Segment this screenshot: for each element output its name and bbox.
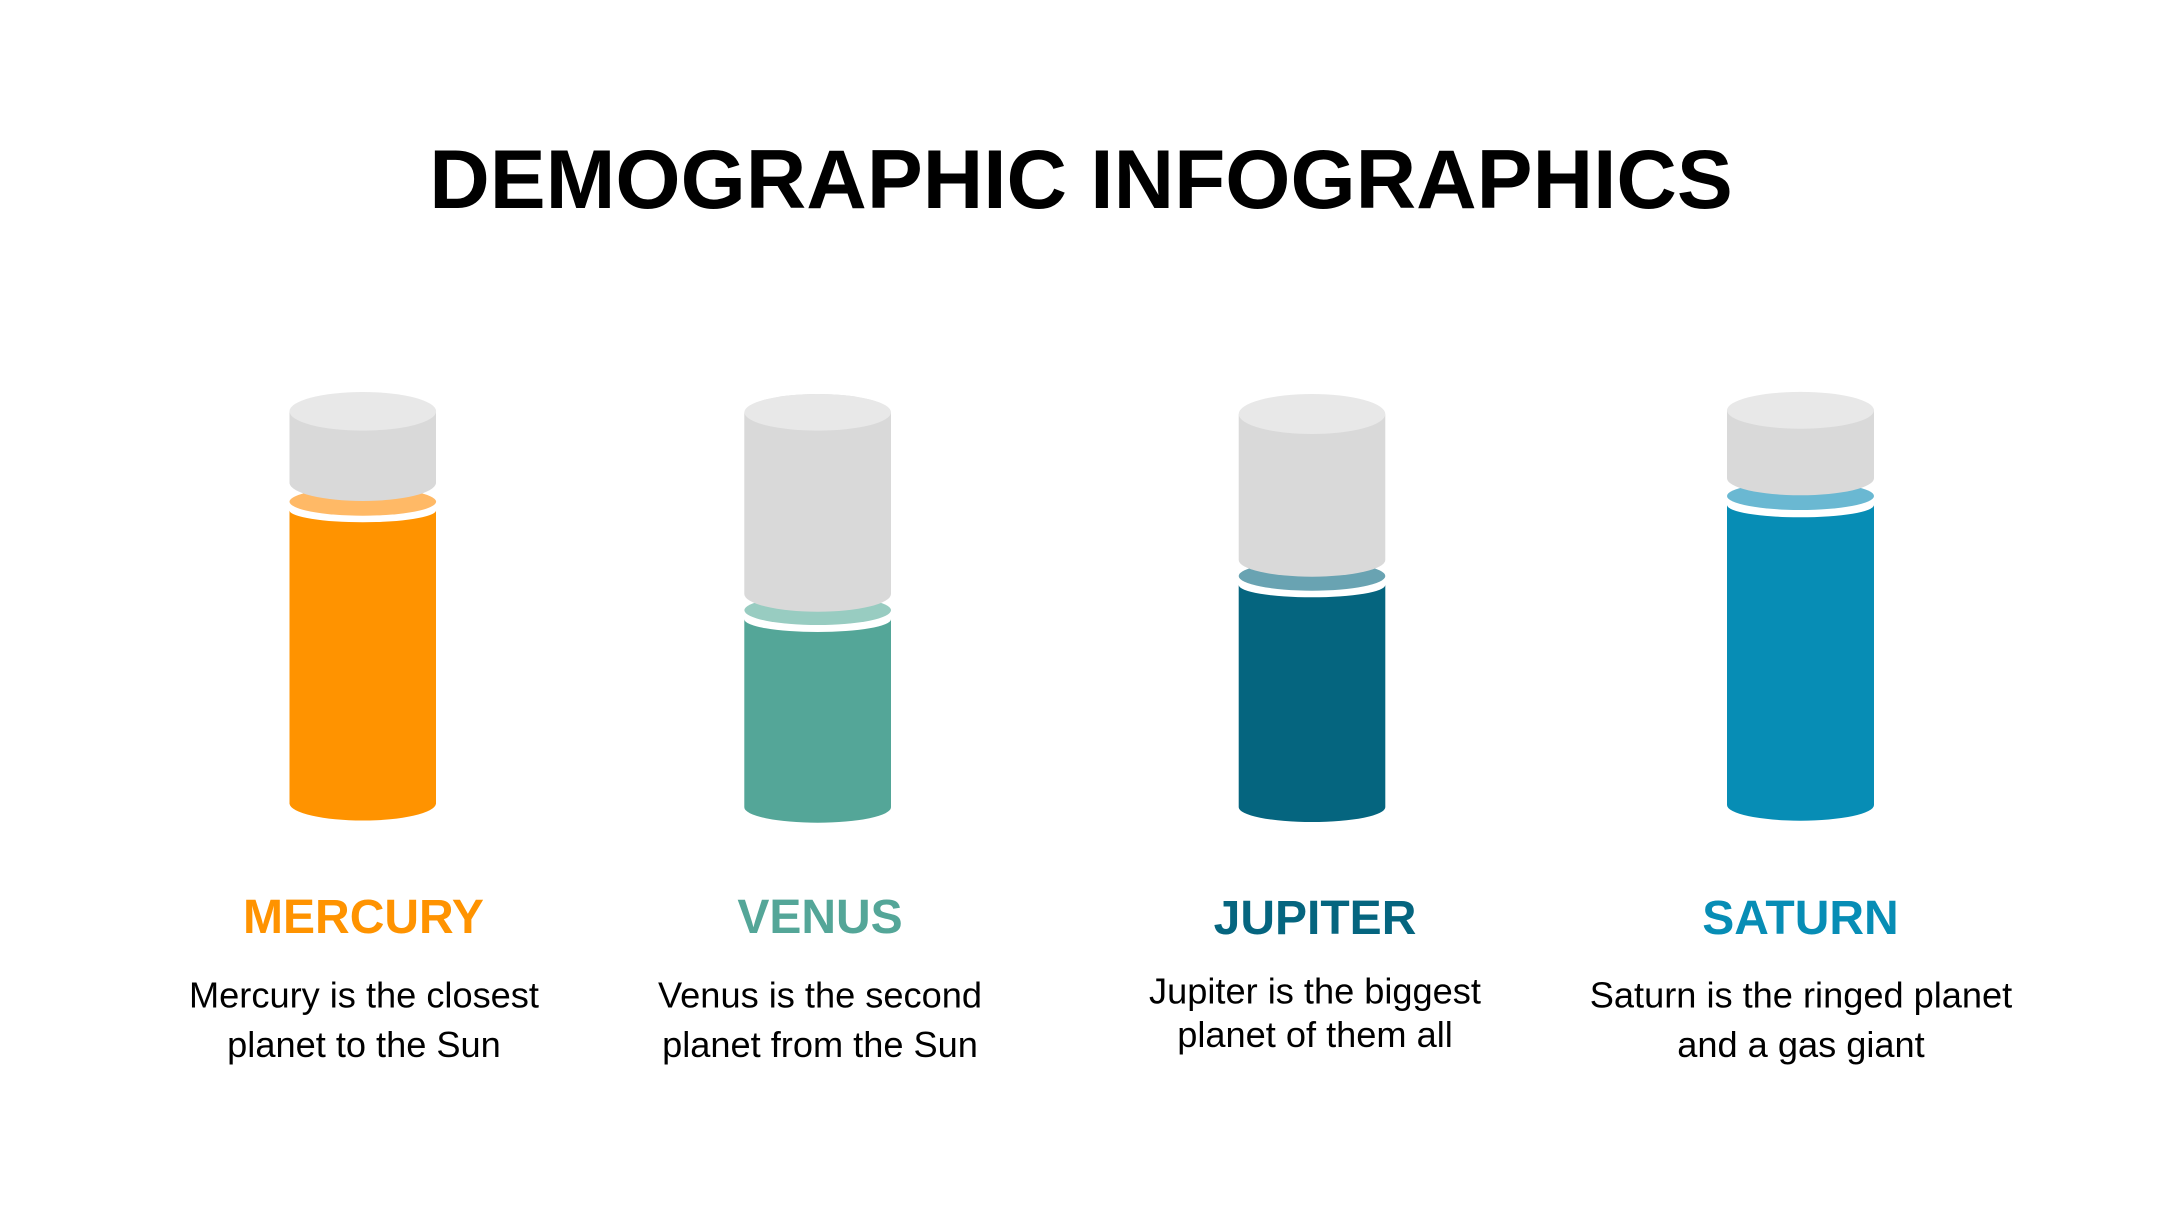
cylinder empty portion	[1239, 395, 1385, 577]
cylinder: mercury 75 percent	[290, 392, 436, 821]
description: mercury	[189, 974, 539, 1065]
description: jupiter	[1149, 970, 1481, 1055]
cylinder fill surface	[744, 596, 891, 625]
description: mercury: planet to the Sun	[227, 1024, 501, 1065]
heading: saturn: SATURN	[1702, 892, 1899, 945]
description: venus: Venus is the second	[658, 974, 982, 1016]
cylinder fill surface	[290, 488, 436, 516]
cylinder: saturn 75 percent	[1727, 392, 1874, 821]
cylinder filled body	[744, 619, 891, 823]
cylinder fill surface	[1239, 561, 1385, 591]
cylinder: venus 50 percent	[744, 394, 891, 823]
cylinder fill surface	[1727, 482, 1874, 510]
description: venus	[658, 974, 982, 1065]
heading: venus: VENUS	[737, 891, 903, 944]
heading: mercury: MERCURY	[243, 891, 484, 944]
cylinder empty portion	[290, 393, 436, 501]
cylinder empty portion	[744, 394, 891, 612]
cylinder empty portion	[1727, 393, 1874, 495]
panel: jupiter	[1149, 394, 1481, 1055]
description: jupiter: Jupiter is the biggest	[1149, 970, 1481, 1012]
cylinder top cap	[744, 394, 891, 431]
heading: jupiter: JUPITER	[1214, 892, 1416, 945]
cylinder top cap	[1727, 392, 1874, 429]
description: jupiter: planet of them all	[1177, 1014, 1453, 1055]
description: saturn: and a gas giant	[1677, 1024, 1925, 1065]
description: saturn: Saturn is the ringed planet	[1590, 974, 2012, 1016]
cylinder filled body	[1727, 505, 1874, 821]
panel: saturn	[1590, 392, 2012, 1065]
description: venus: planet from the Sun	[662, 1024, 978, 1065]
description: saturn	[1590, 974, 2012, 1065]
cylinder filled body	[1239, 585, 1385, 822]
cylinder top cap	[290, 392, 436, 431]
panel: venus	[658, 394, 982, 1065]
cylinder top cap	[1239, 394, 1385, 434]
panel: mercury	[189, 392, 539, 1065]
title: DEMOGRAPHIC INFOGRAPHICS	[429, 132, 1733, 226]
description: mercury: Mercury is the closest	[189, 974, 539, 1016]
cylinder filled body	[290, 511, 436, 821]
cylinder: jupiter 60 percent	[1239, 394, 1385, 822]
